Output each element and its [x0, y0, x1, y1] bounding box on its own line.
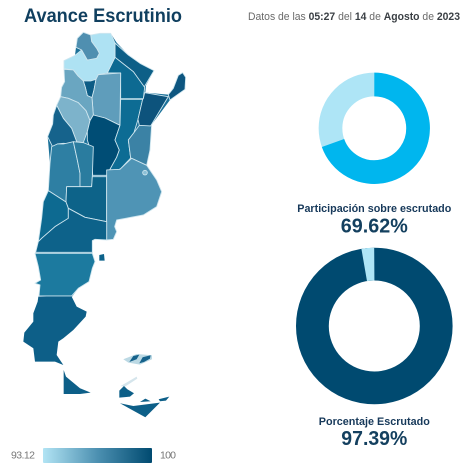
province: Tierra del Fuego and islands — [64, 354, 169, 417]
province: Santa Fe — [107, 99, 143, 175]
peninsula Valdes — [99, 254, 105, 261]
Malvinas islands — [123, 354, 152, 365]
province: Buenos Aires — [107, 158, 162, 240]
province: La Rioja — [57, 97, 90, 143]
province: Santa Cruz — [23, 297, 87, 365]
city of Buenos Aires ring — [143, 170, 147, 175]
South Georgia islands — [119, 377, 137, 398]
map of Argentina by province — [23, 32, 186, 417]
province: Corrientes — [138, 93, 168, 126]
donut: participacion — [330, 84, 418, 172]
province: Entre Rios — [128, 125, 152, 165]
province: Mendoza — [48, 142, 80, 202]
label: porcentaje escrutado: Porcentaje Escrutado — [319, 416, 430, 428]
timestamp text: Datos de las 05:27 del 14 de Agosto de 2023 — [248, 11, 460, 23]
Orcadas islands — [140, 399, 151, 402]
province: Catamarca — [61, 69, 93, 121]
map silhouette — [35, 32, 186, 297]
province: Misiones — [168, 73, 186, 100]
title: Avance Escrutinio — [24, 5, 182, 27]
value: participacion: 69.62% — [341, 216, 408, 238]
province: Salta — [64, 33, 115, 81]
donut: porcentaje escrutado — [312, 264, 436, 388]
label: participacion: Participación sobre escrutado — [297, 203, 452, 215]
province: Neuquen — [38, 191, 68, 242]
province: Chubut — [35, 253, 95, 296]
Antarctic sector — [120, 403, 160, 417]
province: Formosa — [115, 43, 154, 87]
province: Chaco — [107, 57, 145, 99]
legend: color scale — [11, 448, 176, 463]
value: porcentaje escrutado: 97.39% — [341, 428, 407, 450]
province: Cordoba — [87, 115, 120, 175]
legend: color scale: 93.12 — [11, 450, 35, 462]
province: Tucuman — [83, 79, 96, 98]
province: Jujuy — [76, 32, 99, 60]
province: La Pampa — [66, 177, 107, 222]
province: Santiago del Estero — [92, 73, 121, 125]
legend: color scale: 100 — [160, 450, 176, 462]
province: San Juan — [48, 105, 77, 148]
province: Rio Negro — [36, 208, 107, 252]
province: San Luis — [73, 142, 93, 187]
